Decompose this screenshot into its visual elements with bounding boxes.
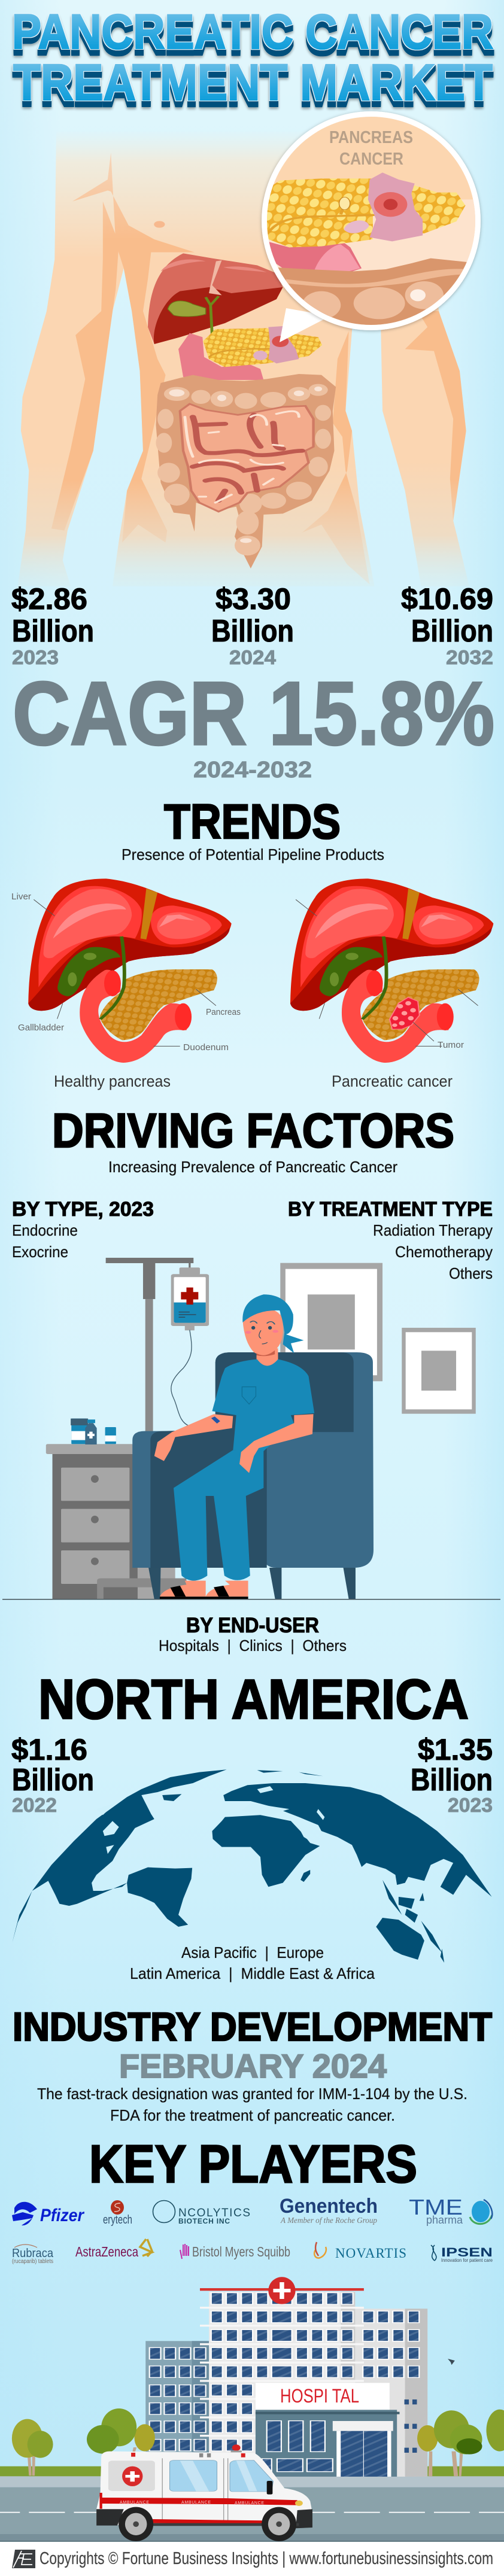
body shading [51,153,466,585]
diagram labels: Pancreas [206,1007,241,1017]
logo: Ipsen [431,2245,493,2263]
logo: Pfizer: Pfizer [40,2206,85,2225]
by type list [12,1198,154,1261]
title [12,5,493,111]
by treatment type list: Radiation Therapy [373,1221,493,1239]
small pancreas [203,326,322,367]
market value 2023: 2023 [12,646,59,668]
market value 2024 [211,582,294,668]
development text: The fast-track designation was granted for IMM-1-104 by the U.S. [37,2085,467,2103]
heading: trends: TRENDS [164,795,341,849]
small intestine [180,404,314,512]
market value 2032: 2032 [446,646,493,668]
north america value 2022: $1.16 [11,1733,87,1766]
market value 2023: $2.86 [11,582,87,616]
world map [12,1769,492,1963]
market value 2024: $3.30 [215,582,291,616]
heading: driving factors: DRIVING FACTORS [52,1104,454,1158]
market value 2024: 2024 [229,646,277,668]
CAGR: 2024-2032 [193,758,312,783]
lens colon [278,258,467,325]
diagram: healthy pancreas [28,878,232,1063]
armchair [132,1352,374,1599]
IV bag [171,1263,209,1330]
stomach [178,333,263,380]
bird [448,2359,455,2365]
logo: Rubraca: (rucaparib) tablets [12,2258,53,2265]
footer [0,2542,504,2576]
north america value 2023: 2023 [448,1794,493,1816]
nightstand [46,1444,186,1599]
diagram labels [11,892,464,1090]
market value 2032: $10.69 [401,582,493,616]
north america value 2022: Billion [12,1763,94,1798]
diagram labels: Healthy pancreas [54,1072,171,1090]
by type list: Exocrine [12,1243,68,1261]
driving factors subtitle: Increasing Prevalence of Pancreatic Cancer [108,1158,397,1176]
illustration: patient receiving infusion [46,1258,476,1599]
market value 2024: Billion [211,614,294,649]
lens tumor [368,172,423,241]
trends subtitle: Presence of Potential Pipeline Products [122,846,384,863]
ambulance [96,2444,312,2541]
by end-user: BY END-USER [186,1614,319,1637]
diagram labels: Tumor [438,1040,464,1050]
ambulance labels: AMBULANCE [181,2501,211,2505]
market value 2023 [11,582,94,668]
by type list: Endocrine [12,1221,78,1239]
market value 2023: Billion [12,614,94,649]
by treatment type list: Chemotherapy [395,1243,493,1261]
other regions [130,1944,375,1982]
ambulance labels: AMBULANCE [120,2501,149,2505]
diagram labels: Pancreatic cancer [332,1072,453,1090]
other regions: Latin America | Middle East & Africa [130,1964,375,1982]
logo: Ipsen: Innovation for patient care [441,2257,493,2263]
heading: north america: NORTH AMERICA [38,1668,469,1730]
logo: TME pharma: pharma [426,2214,463,2226]
logo: Novartis [314,2242,406,2261]
logo: AstraZeneca: AstraZeneca [75,2244,138,2259]
patient [154,1294,314,1599]
trees [12,2408,504,2476]
logo: Pfizer [12,2202,85,2225]
by end-user [159,1614,347,1655]
logo: Novartis: NOVARTIS [335,2246,406,2261]
other regions: Asia Pacific | Europe [181,1944,324,1961]
logo: TME pharma: TME [409,2195,463,2219]
callout tail [280,308,330,342]
by treatment type list: BY TREATMENT TYPE [288,1198,493,1221]
lens label [329,128,413,169]
north america value 2022: 2022 [12,1794,57,1816]
IV tube [171,1330,216,1427]
lens label: CANCER [339,150,403,169]
ground [0,2466,504,2542]
north america value 2023 [411,1733,493,1816]
by type list: BY TYPE, 2023 [12,1198,154,1221]
hospital building [145,2277,427,2477]
logo: Genentech: Genentech [280,2195,378,2218]
logo: Genentech: A Member of the Roche Group [280,2216,377,2225]
hospital sign: HOSPI TAL [280,2385,359,2407]
floor line [2,1599,500,1600]
diagram: pancreatic cancer [290,878,493,1063]
wall pictures [280,1263,476,1414]
heading: key players: KEY PLAYERS [89,2134,417,2194]
logo: Rubraca [12,2245,54,2265]
development date: FEBRUARY 2024 [119,2047,387,2085]
diagram labels: Liver [11,892,31,902]
callout: magnifying lens [257,111,488,342]
medicine bottles [71,1419,116,1444]
by treatment type list: Others [449,1264,493,1282]
diagram labels: Duodenum [183,1042,229,1053]
illustration: hospital street scene [0,2277,504,2542]
development text: FDA for the treatment of pancreatic cancer. [110,2106,395,2124]
market value 2032: Billion [411,614,493,649]
logo: Oncolytics: NCOLYTICS [178,2207,250,2219]
logo: TME pharma [409,2195,492,2226]
diagram labels: Gallbladder [18,1023,64,1033]
logo: Oncolytics [153,2201,250,2225]
ambulance labels [120,2501,264,2505]
logo: erytech: erytech [103,2213,132,2227]
logo: Rubraca: Rubraca [12,2247,54,2260]
IV pole [106,1258,193,1432]
lens label: PANCREAS [329,128,413,147]
illustration: human torso with organs [18,132,469,586]
development text [37,2085,467,2124]
north america value 2023: Billion [411,1763,493,1798]
lens stomach [269,242,362,272]
tumor [390,997,434,1041]
lens pancreas [263,178,373,247]
logo: erytech [103,2200,132,2227]
by treatment type list [288,1198,493,1282]
market value 2032 [401,582,493,668]
north america value 2023: $1.35 [418,1733,493,1766]
large intestine [156,374,336,568]
body silhouette [18,132,469,586]
logo: Oncolytics: BIOTECH INC [178,2217,230,2225]
by end-user: Hospitals | Clinics | Others [159,1637,347,1655]
icon: Fortune Business Insights logo [12,2550,35,2568]
north america value 2022 [11,1733,94,1816]
ambulance labels: AMBULANCE [235,2501,264,2505]
logo: Bristol Myers Squibb: Bristol Myers Squibb [192,2244,290,2259]
logo: Ipsen: IPSEN [441,2246,493,2259]
liver [148,253,283,344]
